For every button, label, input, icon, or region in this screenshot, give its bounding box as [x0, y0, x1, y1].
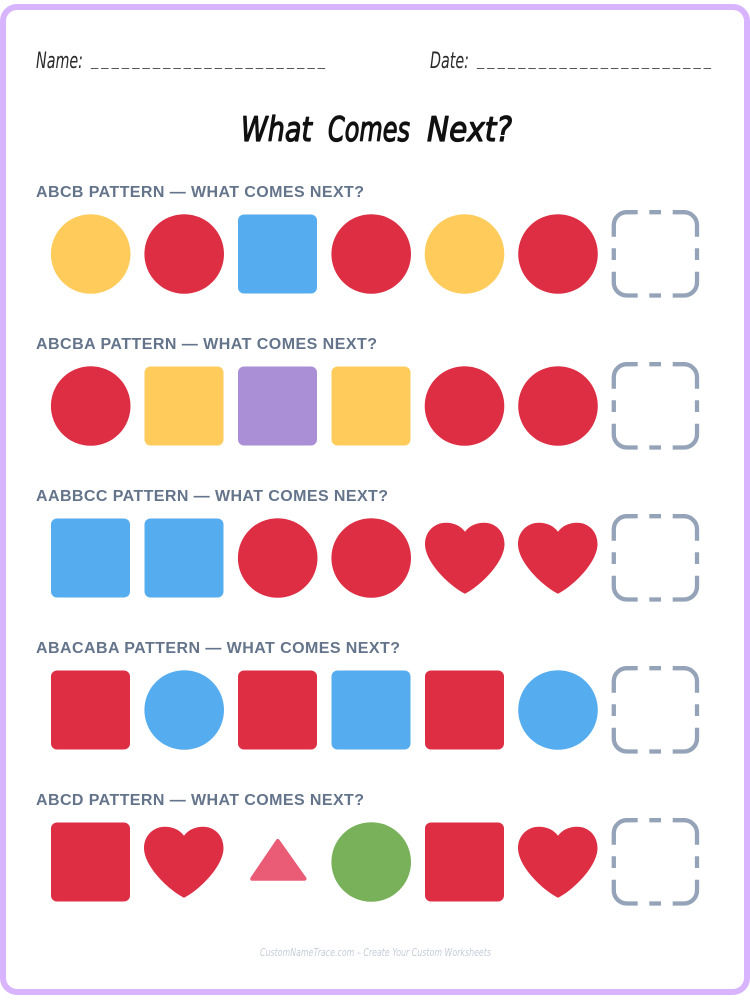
- blue square: [51, 518, 130, 598]
- red circle: [144, 214, 224, 294]
- blue circle: [518, 670, 598, 750]
- yellow square: [144, 366, 224, 446]
- green circle: [331, 822, 411, 902]
- row 5 heading: ABCD PATTERN — WHAT COMES NEXT?: [36, 792, 364, 809]
- date field: Date:: [430, 49, 469, 74]
- purple square: [238, 366, 317, 446]
- red square: [425, 670, 504, 750]
- red heart: [518, 827, 598, 898]
- title: Comes: [328, 110, 410, 150]
- blue square: [238, 214, 317, 294]
- footer: CustomNameTrace.com – Create Your Custom Worksheets: [260, 947, 491, 959]
- red circle: [238, 518, 318, 598]
- empty answer box: [614, 212, 697, 296]
- row 3: AABBCC pattern: [36, 488, 697, 600]
- title: Next?: [427, 110, 512, 150]
- yellow circle: [51, 214, 131, 294]
- row 3 heading: AABBCC PATTERN — WHAT COMES NEXT?: [36, 488, 388, 505]
- empty answer box: [614, 516, 697, 600]
- red heart: [144, 827, 224, 898]
- red circle: [331, 214, 411, 294]
- blue square: [144, 518, 224, 598]
- yellow square: [332, 366, 410, 446]
- red circle: [51, 366, 131, 446]
- red heart: [518, 523, 598, 594]
- row 1: ABCB pattern: [36, 184, 697, 296]
- pink triangle: [252, 841, 304, 879]
- date field: _______________________: [476, 54, 712, 70]
- blue circle: [144, 670, 224, 750]
- empty answer box: [614, 364, 697, 448]
- red square: [51, 670, 130, 750]
- row 1 heading: ABCB PATTERN — WHAT COMES NEXT?: [36, 184, 364, 201]
- name field: [36, 49, 326, 74]
- row 4 heading: ABACABA PATTERN — WHAT COMES NEXT?: [36, 640, 400, 657]
- title: What: [241, 110, 313, 150]
- yellow circle: [425, 214, 504, 294]
- red square: [425, 822, 504, 902]
- red circle: [425, 366, 504, 446]
- name field: _______________________: [90, 54, 326, 70]
- name field: Name:: [36, 49, 83, 74]
- red square: [51, 822, 130, 902]
- date field: [430, 49, 712, 74]
- red circle: [331, 518, 411, 598]
- row 2 heading: ABCBA PATTERN — WHAT COMES NEXT?: [36, 336, 377, 353]
- empty answer box: [614, 668, 697, 752]
- red circle: [518, 366, 598, 446]
- title: [241, 110, 512, 150]
- row 2: ABCBA pattern: [36, 336, 697, 448]
- red circle: [518, 214, 598, 294]
- red square: [238, 670, 317, 750]
- empty answer box: [614, 820, 697, 904]
- blue square: [332, 670, 410, 750]
- red heart: [425, 523, 504, 594]
- row 5: ABCD pattern: [36, 792, 697, 904]
- row 4: ABACABA pattern: [36, 640, 697, 752]
